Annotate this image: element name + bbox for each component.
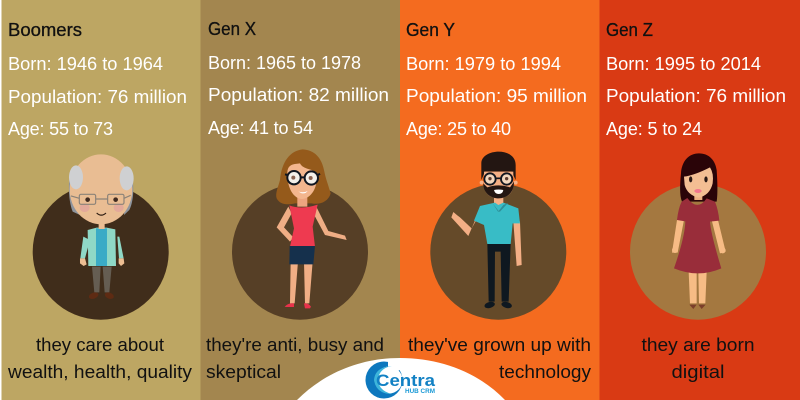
Gen X stats: Age: 41 to 54	[208, 118, 313, 138]
panel: Gen Z	[600, 0, 800, 400]
Gen Y stats: Born: 1979 to 1994	[406, 54, 561, 74]
Boomers stats: Age: 55 to 73	[8, 119, 113, 139]
logo wordmark: Centra	[376, 371, 436, 390]
icon: woman with glasses	[276, 149, 347, 308]
logo subtitle: HUB CRM	[405, 389, 435, 395]
icon: young woman in dress	[672, 153, 726, 309]
circle: Gen Z backdrop	[630, 184, 766, 320]
Gen X heading: Gen X	[208, 19, 256, 39]
circle: Boomers backdrop	[33, 184, 169, 320]
logo badge	[297, 358, 505, 400]
Gen Z stats	[606, 54, 786, 139]
panel: Gen Y	[400, 0, 600, 400]
Gen X caption: skeptical	[206, 362, 281, 382]
Gen Y caption: they've grown up with	[408, 335, 591, 355]
Boomers heading: Boomers	[8, 20, 82, 40]
Boomers caption: wealth, health, quality	[7, 362, 192, 382]
Gen Y caption: technology	[499, 362, 591, 382]
Gen Z stats: Population: 76 million	[606, 86, 786, 106]
Gen Y heading: Gen Y	[406, 20, 455, 40]
Gen X stats	[208, 53, 389, 138]
Gen Y caption	[408, 335, 591, 382]
Gen Z heading: Gen Z	[606, 20, 653, 40]
Gen Z stats: Born: 1995 to 2014	[606, 54, 761, 74]
circle: Gen Y backdrop	[430, 184, 566, 320]
Gen Y stats	[406, 54, 587, 139]
panel: Boomers	[2, 0, 200, 400]
Gen Z caption: digital	[672, 362, 724, 382]
Gen X stats: Population: 82 million	[208, 85, 389, 105]
Gen X caption	[206, 335, 384, 382]
Gen Z caption: they are born	[642, 335, 754, 355]
Gen Y stats: Population: 95 million	[406, 86, 587, 106]
Boomers stats: Born: 1946 to 1964	[8, 54, 163, 74]
Boomers caption: they care about	[36, 335, 164, 355]
Boomers stats: Population: 76 million	[8, 87, 187, 107]
Gen X caption: they're anti, busy and	[206, 335, 384, 355]
icon: Centra swirl logo	[366, 360, 403, 398]
icon: old man	[69, 154, 134, 300]
icon: bearded man	[451, 152, 522, 309]
Gen Z stats: Age: 5 to 24	[606, 119, 702, 139]
Gen Z caption	[642, 335, 754, 382]
circle: Gen X backdrop	[232, 184, 368, 320]
panel: Gen X	[200, 0, 400, 400]
Gen X stats: Born: 1965 to 1978	[208, 53, 361, 73]
Gen Y stats: Age: 25 to 40	[406, 119, 511, 139]
Boomers stats	[8, 54, 187, 139]
Boomers caption	[7, 335, 192, 382]
